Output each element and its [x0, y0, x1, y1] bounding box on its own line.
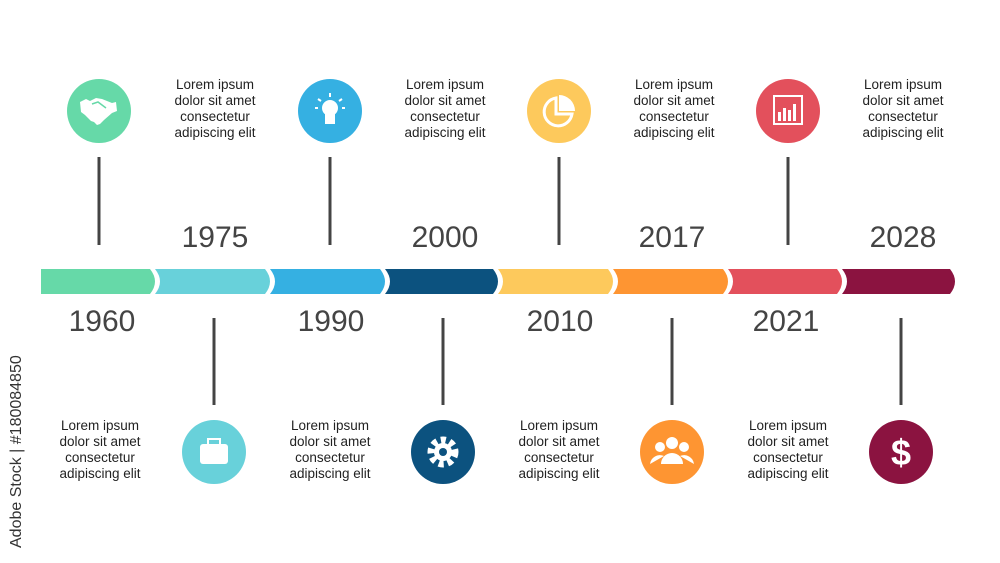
icon: dollar [869, 420, 933, 484]
text blocks top [174, 77, 256, 140]
text: Lorem ipsum [749, 418, 827, 433]
text: consectetur [753, 450, 823, 465]
timeline bar [41, 269, 955, 294]
watermark: side text: Adobe Stock | #180084850 [8, 355, 25, 548]
text blocks top: Lorem ipsum [176, 77, 254, 92]
text: 2021 [753, 305, 819, 338]
text: Lorem ipsum [406, 77, 484, 92]
text blocks bottom: dolor sit amet [59, 434, 141, 449]
icon: gear [411, 420, 475, 484]
text blocks bottom: adipiscing elit [59, 466, 141, 481]
text: consectetur [410, 109, 480, 124]
icon: pie chart [527, 79, 591, 143]
text: consectetur [524, 450, 594, 465]
text: adipiscing elit [633, 125, 715, 140]
text: consectetur [868, 109, 938, 124]
text: adipiscing elit [404, 125, 486, 140]
text: Lorem ipsum [291, 418, 369, 433]
text: dolor sit amet [404, 93, 486, 108]
text: adipiscing elit [747, 466, 829, 481]
icon: bar chart [756, 79, 820, 143]
text: dolor sit amet [289, 434, 371, 449]
connector lines [99, 157, 901, 405]
text: dolor sit amet [633, 93, 715, 108]
text: dolor sit amet [862, 93, 944, 108]
text: adipiscing elit [862, 125, 944, 140]
text: 2017 [639, 221, 705, 254]
icon: dollar: $ [891, 432, 911, 473]
text: 2028 [870, 221, 936, 254]
text: Lorem ipsum [635, 77, 713, 92]
text: consectetur [295, 450, 365, 465]
text: adipiscing elit [289, 466, 371, 481]
text: 1990 [298, 305, 364, 338]
icon: lightbulb [298, 79, 362, 143]
text: consectetur [639, 109, 709, 124]
text blocks bottom: consectetur [65, 450, 135, 465]
text: adipiscing elit [518, 466, 600, 481]
text: Lorem ipsum [520, 418, 598, 433]
icon: people [640, 420, 704, 484]
text: 2010 [527, 305, 593, 338]
text: dolor sit amet [747, 434, 829, 449]
text blocks bottom: Lorem ipsum [61, 418, 139, 433]
text blocks top: dolor sit amet [174, 93, 256, 108]
years below: 1960 [69, 305, 135, 338]
text blocks top: adipiscing elit [174, 125, 256, 140]
text: dolor sit amet [518, 434, 600, 449]
years above: 1975 [182, 221, 248, 254]
icon: briefcase [182, 420, 246, 484]
text blocks top: consectetur [180, 109, 250, 124]
text: Lorem ipsum [864, 77, 942, 92]
icon: handshake [67, 79, 131, 143]
text blocks bottom [59, 418, 141, 481]
text: 2000 [412, 221, 478, 254]
